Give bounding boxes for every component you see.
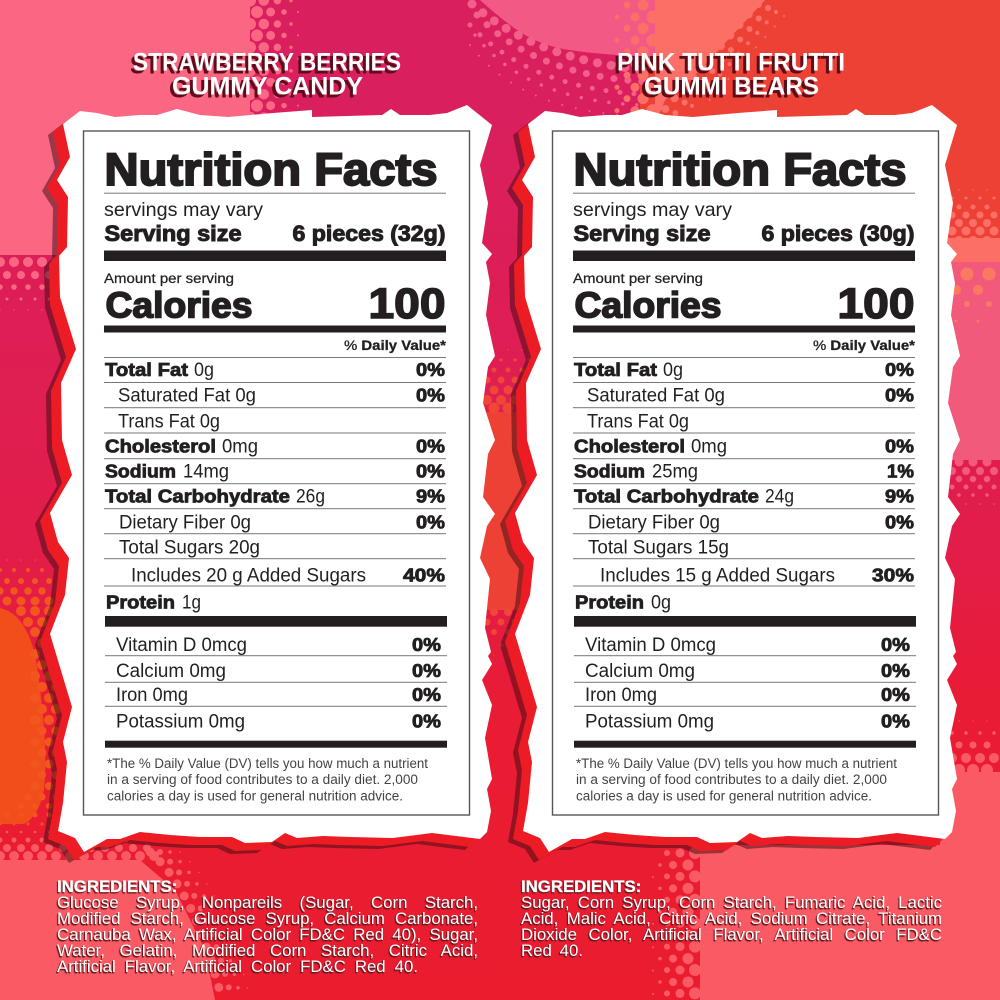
servings block [104,193,446,261]
nutrient rows: Dietary Fiber 0g [588,512,720,533]
ingredients: pink tutti frutti: Red 40. [521,941,583,960]
nutrient rows: 0% [885,511,914,532]
title: strawberry berries gummy candy: GUMMY CANDY [172,72,363,100]
nutrient rows: Includes 20 g Added Sugars [131,566,366,587]
servings block: servings may vary [104,199,263,221]
nutrient rows: 1g [182,592,201,613]
calories block: Calories [106,284,252,326]
ingredients: pink tutti frutti: Acid, Malic Acid, Citric Acid, Sodium Citrate, Titanium [521,909,942,928]
vitamins and minerals rows: 0% [881,634,910,655]
ingredients: pink tutti frutti: Sugar, Corn Syrup, Corn Starch, Fumaric Acid, Lactic [521,893,942,912]
footnote: in a serving of food contributes to a daily diet. 2,000 [576,772,887,787]
nutrient rows: 0% [416,511,445,532]
calories block: Calories [574,284,722,326]
nutrient rows: 0% [416,385,445,406]
vitamins and minerals rows [574,634,916,748]
ingredients: strawberry berries: Carnauba Wax, Artificial Color FD&C Red 40), Sugar, [57,925,478,944]
nutrient rows: Saturated Fat 0g [118,386,256,407]
vitamins and minerals rows: 0% [412,684,441,705]
ingredients: strawberry berries: INGREDIENTS: [57,877,177,896]
vitamins and minerals rows: Vitamin D 0mcg [585,635,716,656]
title: pink tutti frutti gummi bears: GUMMI BEARS [644,72,819,100]
nutrient rows: 14mg [183,462,229,483]
servings block [573,193,915,261]
ingredients: pink tutti frutti [520,877,942,960]
calories block [573,271,915,332]
vitamins and minerals rows: 0% [412,634,441,655]
nutrition label: pink tutti frutti [552,131,938,815]
nutrient rows: Dietary Fiber 0g [119,512,251,533]
footnote: *The % Daily Value (DV) tells you how much a nutrient [107,756,428,771]
daily value header: % Daily Value* [344,338,447,353]
ingredients: strawberry berries: Water, Gelatin, Modified Corn Starch, Citric Acid, [57,941,478,960]
servings block: Serving size [574,221,710,246]
nutrient rows [573,357,916,627]
nutrient rows: Protein [575,591,644,612]
heading: nutrition facts: Nutrition Facts [574,144,906,195]
title: strawberry berries gummy candy: STRAWBERRY BERRIES [133,48,401,76]
nutrient rows: Cholesterol [574,436,685,457]
nutrient rows: 24g [765,487,794,508]
nutrient rows: Total Carbohydrate [574,486,759,507]
nutrient rows: Includes 15 g Added Sugars [600,566,835,587]
servings block: servings may vary [573,199,732,221]
nutrient rows: 0% [416,359,445,380]
daily value header: % Daily Value* [813,338,916,353]
nutrient rows: 9% [885,486,914,507]
nutrient rows: 1% [887,461,914,482]
nutrient rows: Total Sugars 20g [119,537,260,558]
vitamins and minerals rows: 0% [881,660,910,681]
nutrient rows: Cholesterol [105,436,216,457]
ingredients: strawberry berries: Glucose Syrup, Nonpareils (Sugar, Corn Starch, [57,893,478,912]
title: pink tutti frutti gummi bears [617,48,845,100]
vitamins and minerals rows [105,634,447,748]
vitamins and minerals rows: Iron 0mg [585,685,657,706]
nutrient rows: 26g [296,487,325,508]
nutrient rows: Protein [106,591,175,612]
footnote: *The % Daily Value (DV) tells you how much a nutrient [576,756,897,771]
vitamins and minerals rows: Calcium 0mg [585,661,695,682]
nutrient rows: 30% [872,565,914,586]
nutrient rows: Saturated Fat 0g [587,386,725,407]
nutrient rows: 0g [651,592,671,613]
vitamins and minerals rows: 0% [412,711,441,732]
nutrient rows: 25mg [652,462,698,483]
vitamins and minerals rows: Calcium 0mg [116,661,226,682]
ingredients: strawberry berries [56,877,478,976]
vitamins and minerals rows: 0% [412,660,441,681]
footnote: calories a day is used for general nutrition advice. [576,789,872,804]
vitamins and minerals rows: Iron 0mg [116,685,188,706]
vitamins and minerals rows: Vitamin D 0mcg [116,635,247,656]
nutrient rows: 40% [403,565,445,586]
ingredients: strawberry berries: Artificial Flavor, Artificial Color FD&C Red 40. [57,957,418,976]
calories block: 100 [838,280,914,328]
ingredients: pink tutti frutti: Dioxide Color, Artificial Flavor, Artificial Color FD&C [521,925,942,944]
servings block: 6 pieces (30g) [762,221,914,246]
nutrient rows: 0% [416,461,445,482]
footnote [107,756,428,804]
calories block: 100 [368,280,446,328]
nutrient rows: Trans Fat 0g [587,411,689,432]
servings block: 6 pieces (32g) [292,221,446,246]
nutrient rows: 0mg [691,437,727,458]
panel: pink tutti frutti torn paper card [500,105,960,863]
nutrient rows: Total Fat [574,359,657,380]
nutrient rows: 0% [885,385,914,406]
calories block [104,271,446,332]
nutrient rows: Sodium [574,461,645,482]
nutrient rows: 0g [663,360,683,381]
nutrient rows: 9% [416,486,445,507]
title: strawberry berries gummy candy [133,48,401,100]
nutrient rows: Total Carbohydrate [105,486,290,507]
nutrition label: strawberry berries [84,131,470,815]
nutrient rows [104,357,447,627]
vitamins and minerals rows: 0% [881,684,910,705]
ingredients: strawberry berries: Modified Starch, Glucose Syrup, Calcium Carbonate, [57,909,478,928]
servings block: Serving size [104,221,242,246]
nutrient rows: Total Sugars 15g [588,537,729,558]
nutrient rows: 0g [194,360,214,381]
nutrient rows: Sodium [105,461,176,482]
heading: nutrition facts: Nutrition Facts [104,144,438,195]
title: pink tutti frutti gummi bears: PINK TUTTI FRUTTI [617,48,845,76]
vitamins and minerals rows: 0% [881,711,910,732]
nutrient rows: 0% [885,359,914,380]
footnote [576,756,897,804]
footnote: in a serving of food contributes to a daily diet. 2,000 [107,772,418,787]
footnote: calories a day is used for general nutrition advice. [107,789,403,804]
vitamins and minerals rows: Potassium 0mg [585,712,714,733]
ingredients: pink tutti frutti: INGREDIENTS: [521,877,641,896]
calories block: Amount per serving [104,271,234,286]
calories block: Amount per serving [573,271,703,286]
nutrient rows: Trans Fat 0g [118,411,220,432]
nutrient rows: Total Fat [105,359,188,380]
vitamins and minerals rows: Potassium 0mg [116,712,245,733]
nutrient rows: 0mg [222,437,258,458]
nutrient rows: 0% [416,436,445,457]
nutrient rows: 0% [885,436,914,457]
panel: strawberry berries torn paper card [35,105,495,863]
